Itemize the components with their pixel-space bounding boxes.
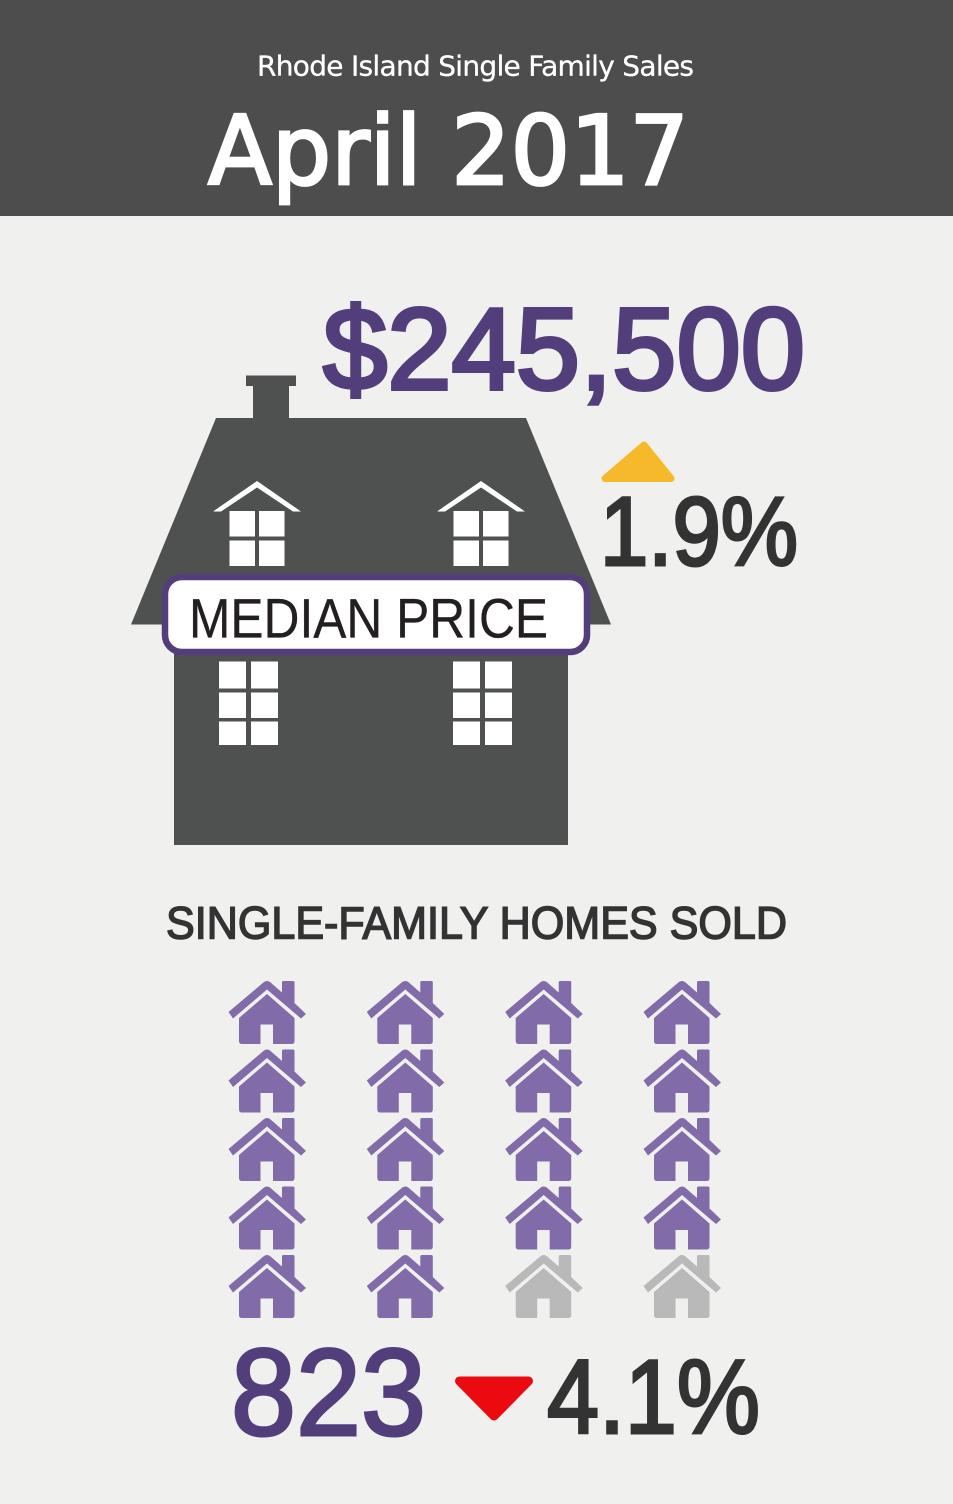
house body [174, 620, 568, 845]
left dormer window [213, 481, 301, 566]
icon: column 2 houses [367, 981, 444, 1318]
homes sold count: 823 [231, 1325, 426, 1462]
icon: column 3 houses [505, 981, 583, 1318]
house pictogram grid [228, 981, 721, 1318]
sales change percent: 4.1% [547, 1339, 760, 1456]
roof [131, 418, 611, 624]
right lower window [453, 662, 512, 745]
homes sold heading: SINGLE-FAMILY HOMES SOLD [166, 898, 787, 948]
subtitle: Rhode Island Single Family Sales [257, 50, 694, 82]
left lower window [219, 662, 278, 745]
icon: up arrow [605, 445, 671, 478]
median price value: $245,500 [323, 284, 805, 414]
icon: column 1 houses [228, 981, 306, 1318]
right dormer window [437, 481, 525, 566]
icon: column 4 houses [644, 981, 721, 1318]
icon: down arrow [460, 1381, 528, 1416]
title: April 2017 [208, 97, 689, 207]
chimney [246, 376, 296, 420]
header banner [0, 0, 953, 216]
house illustration [131, 376, 611, 845]
median price label: MEDIAN PRICE [189, 586, 548, 650]
price change percent: 1.9% [600, 477, 798, 586]
